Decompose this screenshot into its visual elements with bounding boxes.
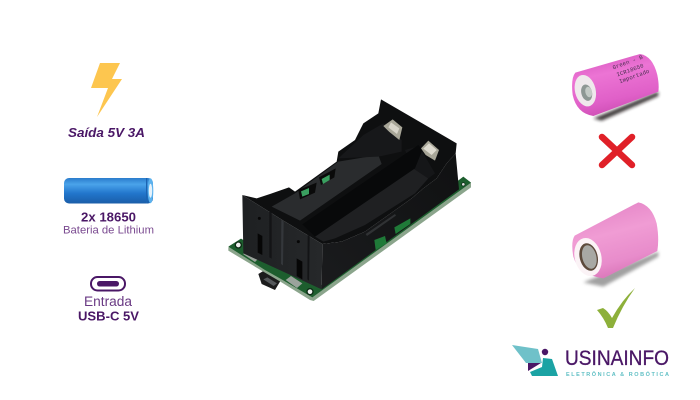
label: USB-C 5V: USB-C 5V bbox=[78, 308, 139, 324]
icon: blue 18650 battery bbox=[64, 178, 153, 204]
logo: UsinaInfo bbox=[512, 345, 669, 378]
window tabs bbox=[298, 168, 336, 199]
icon: green check bbox=[597, 288, 635, 328]
PCB bbox=[228, 177, 471, 301]
divider bbox=[302, 145, 422, 237]
icon: USB-C port bbox=[91, 277, 125, 290]
battery label text bbox=[612, 54, 651, 85]
logo wordmark: USINAINFO bbox=[565, 347, 669, 370]
product: battery holder board bbox=[228, 99, 471, 301]
logo mark bbox=[512, 345, 558, 376]
left cell channel bbox=[272, 123, 402, 221]
correct battery: pink plain bbox=[570, 202, 658, 287]
logo tagline: ELETRÔNICA & ROBÓTICA bbox=[566, 370, 669, 378]
icon: red cross bbox=[602, 137, 632, 165]
battery label text: Green - B bbox=[612, 54, 644, 71]
holder outer side wall bbox=[322, 153, 459, 289]
holder top rim and interior bbox=[242, 99, 457, 244]
right cell channel bbox=[315, 146, 435, 242]
incorrect battery: pink with label bbox=[571, 54, 659, 121]
label: battery count: 2x 18650 bbox=[81, 210, 136, 224]
icon: lightning bolt bbox=[91, 63, 122, 117]
USB-C connector bbox=[258, 270, 281, 290]
label: output: Saída 5V 3A bbox=[68, 125, 145, 140]
label: input: Entrada bbox=[84, 294, 132, 309]
front wall bbox=[242, 195, 322, 289]
side wall windows bbox=[366, 214, 410, 250]
label: battery type: Bateria de Lithium bbox=[63, 224, 154, 236]
contact clips bbox=[383, 119, 439, 161]
battery label text: ICR18650 bbox=[616, 62, 645, 79]
battery label text: Importado bbox=[618, 68, 651, 85]
